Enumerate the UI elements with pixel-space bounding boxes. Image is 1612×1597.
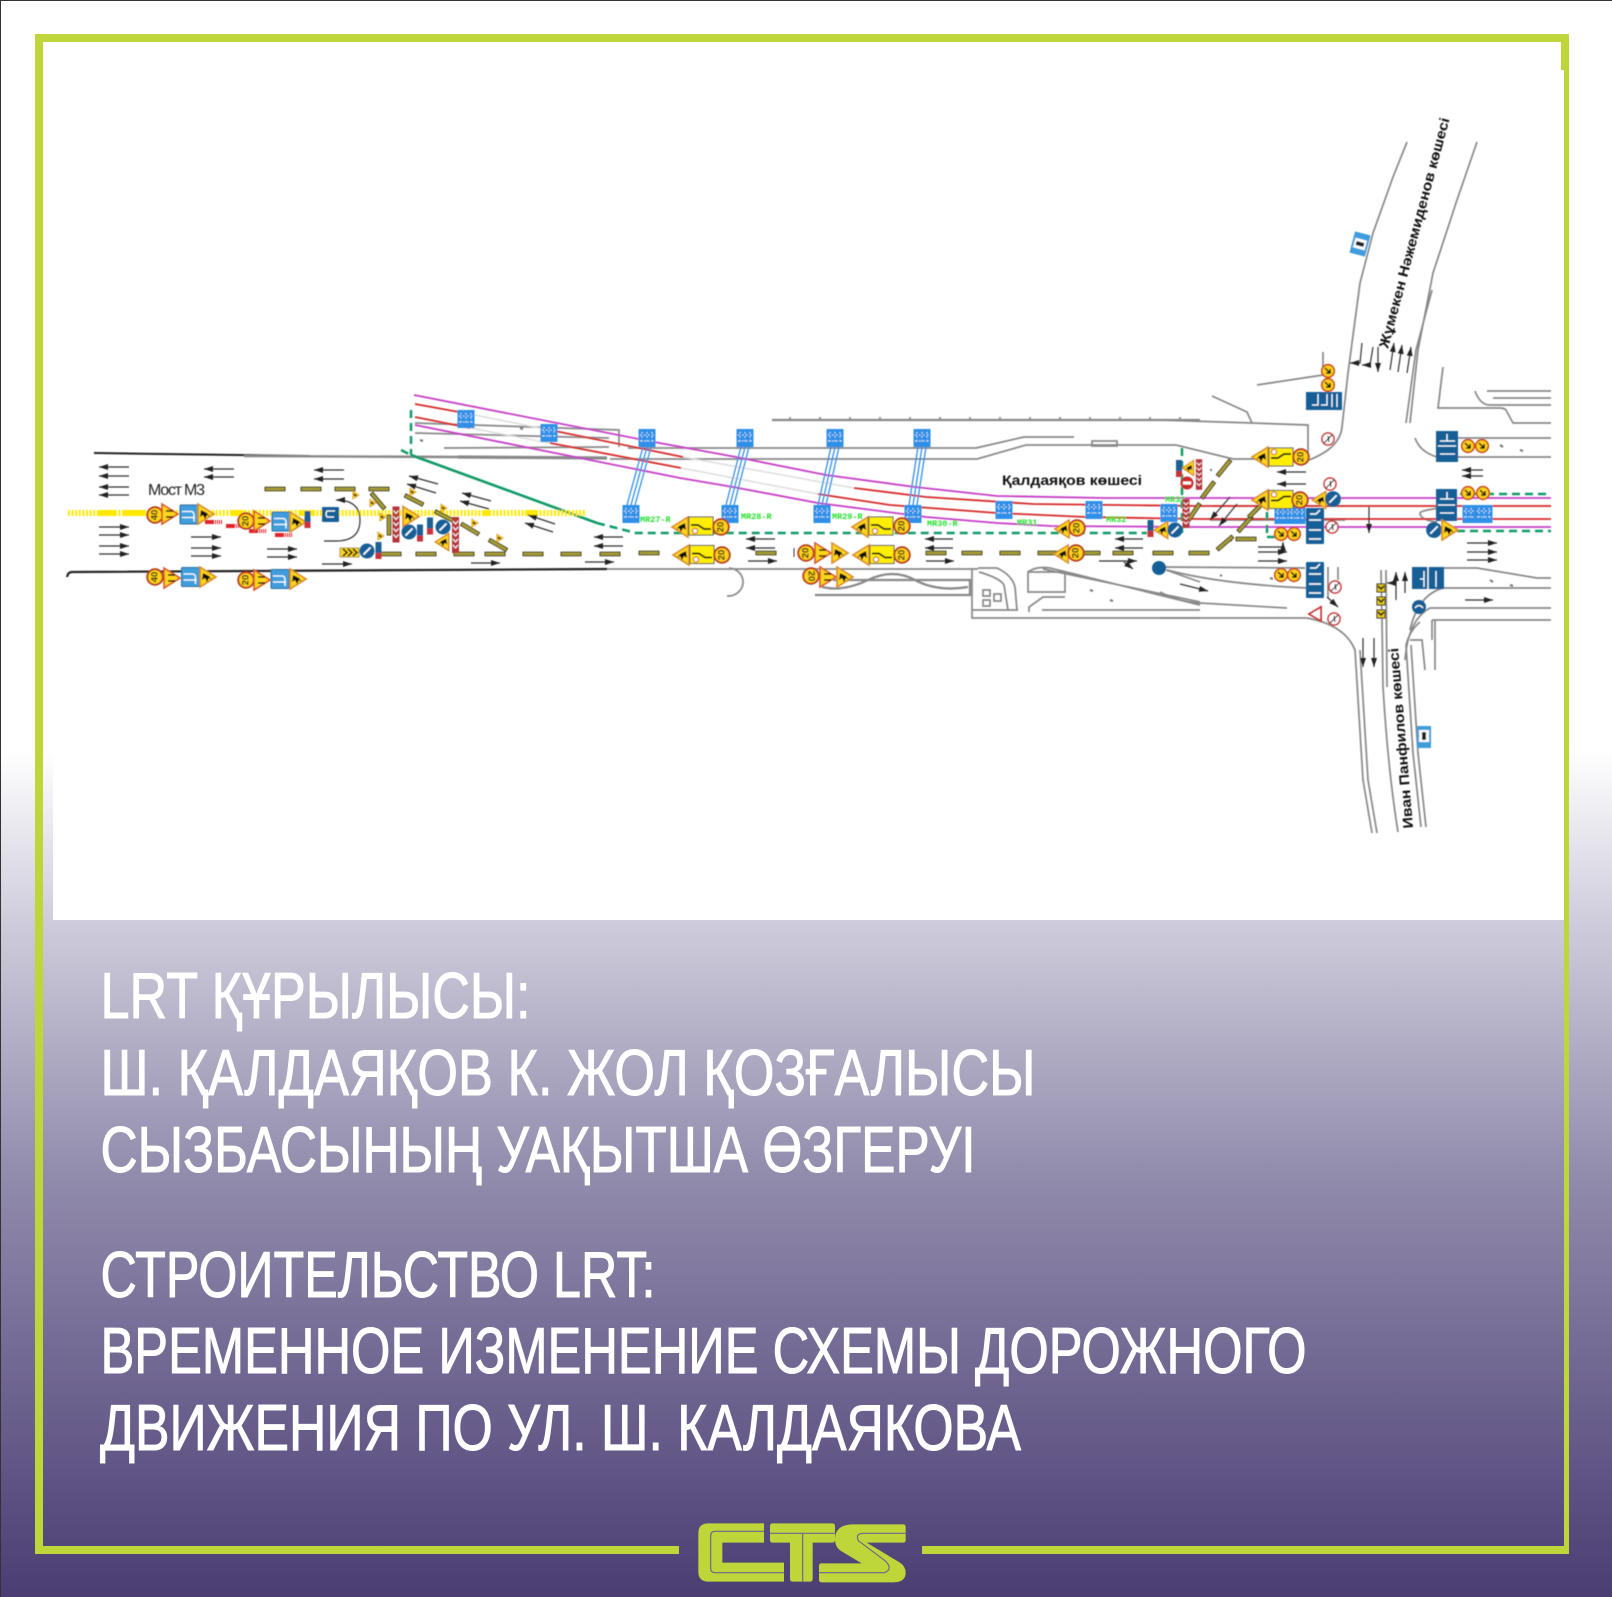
pier labels: MR33 xyxy=(1165,495,1185,505)
pier labels: MR29-R xyxy=(832,512,864,522)
Kazakh heading: LRT ҚҰРЫЛЫСЫ: xyxy=(100,959,530,1032)
Kazakh heading: Ш. ҚАЛДАЯҚОВ К. ЖОЛ ҚОЗҒАЛЫСЫ xyxy=(100,1036,1036,1109)
white map panel xyxy=(53,42,1564,920)
LRT piers xyxy=(458,410,1492,524)
pier labels: MR27-R xyxy=(640,515,672,525)
pier labels: MR31 xyxy=(1017,518,1037,528)
Kazakh heading xyxy=(100,959,1036,1186)
Russian heading xyxy=(100,1238,1306,1464)
sign group row D: 20 xyxy=(896,550,908,560)
LRT guideway lines xyxy=(414,395,1551,527)
sign group: 40 upper: 40 xyxy=(150,510,160,520)
sign group: 20 upper: 20 xyxy=(240,516,252,526)
sign group: 20 lower xyxy=(238,569,306,590)
sign group: 40 lower xyxy=(147,567,216,588)
bridge label: Мост М3 xyxy=(148,482,205,499)
street label Nazhimedenov: Жұмекен Нәжемиденов көшесі xyxy=(1375,116,1452,351)
delineators xyxy=(265,459,1264,556)
sign group: 20 lower: 20 xyxy=(240,575,252,585)
sign group intersection west upper xyxy=(1252,447,1309,467)
direction signs and prohibitions xyxy=(1275,365,1489,625)
sign group: 40 lower: 40 xyxy=(150,572,160,582)
sign group row A: 20 xyxy=(716,522,726,532)
green work zone boundary xyxy=(401,410,1551,537)
sign group row D xyxy=(853,545,910,565)
lane closure taper signs xyxy=(322,488,503,559)
sign group work 20 lower: 20 xyxy=(1070,548,1082,558)
pier labels: MR28-R xyxy=(741,512,773,522)
sign group intersection west lower: 20 xyxy=(1294,495,1306,505)
street label Panfilov: Иван Панфилов көшесі xyxy=(1385,647,1416,829)
sign group: 20 upper xyxy=(238,511,310,532)
sign group mid small: 20 xyxy=(800,548,812,558)
Russian heading: ДВИЖЕНИЯ ПО УЛ. Ш. КАЛДАЯКОВА xyxy=(100,1391,1022,1464)
sign group row C: 20 xyxy=(896,521,908,531)
sign group mid lower xyxy=(803,567,853,587)
sign group row C xyxy=(852,517,910,537)
red barrier dashes xyxy=(205,522,292,535)
Russian heading: СТРОИТЕЛЬСТВО LRT: xyxy=(100,1238,656,1311)
road geometry xyxy=(67,142,1551,833)
sign group intersection west lower xyxy=(1252,490,1308,510)
traffic arrows xyxy=(99,343,1497,667)
sign group work 20 upper: 20 xyxy=(1072,523,1082,533)
bus stop sign north xyxy=(1349,231,1371,257)
sign group row B xyxy=(673,545,730,565)
sign group mid lower: 20 xyxy=(806,571,816,581)
sign group work 20 upper xyxy=(1055,520,1085,538)
sign group: 40 upper xyxy=(147,504,214,524)
pier labels xyxy=(640,495,1185,529)
sign group intersection west upper: 20 xyxy=(1296,452,1306,462)
CTS logo xyxy=(698,1523,906,1582)
sign group row B: 20 xyxy=(716,550,728,560)
pier labels: MR32 xyxy=(1106,515,1126,525)
sign group row A xyxy=(672,517,729,537)
sign group west of intersection xyxy=(1148,459,1202,582)
road map schematic xyxy=(67,116,1551,833)
yellow construction band xyxy=(68,510,585,516)
Russian heading: ВРЕМЕННОЕ ИЗМЕНЕНИЕ СХЕМЫ ДОРОЖНОГО xyxy=(100,1314,1306,1387)
pier labels: MR30-R xyxy=(927,519,959,529)
sign group mid small xyxy=(794,543,848,563)
Kazakh heading: СЫЗБАСЫНЫҢ УАҚЫТША ӨЗГЕРУІ xyxy=(100,1113,976,1186)
bus stop sign south xyxy=(1417,726,1431,748)
street label Kaldayakov: Қалдаяқов көшесі xyxy=(1002,472,1142,488)
sign group work 20 lower xyxy=(1054,545,1084,563)
